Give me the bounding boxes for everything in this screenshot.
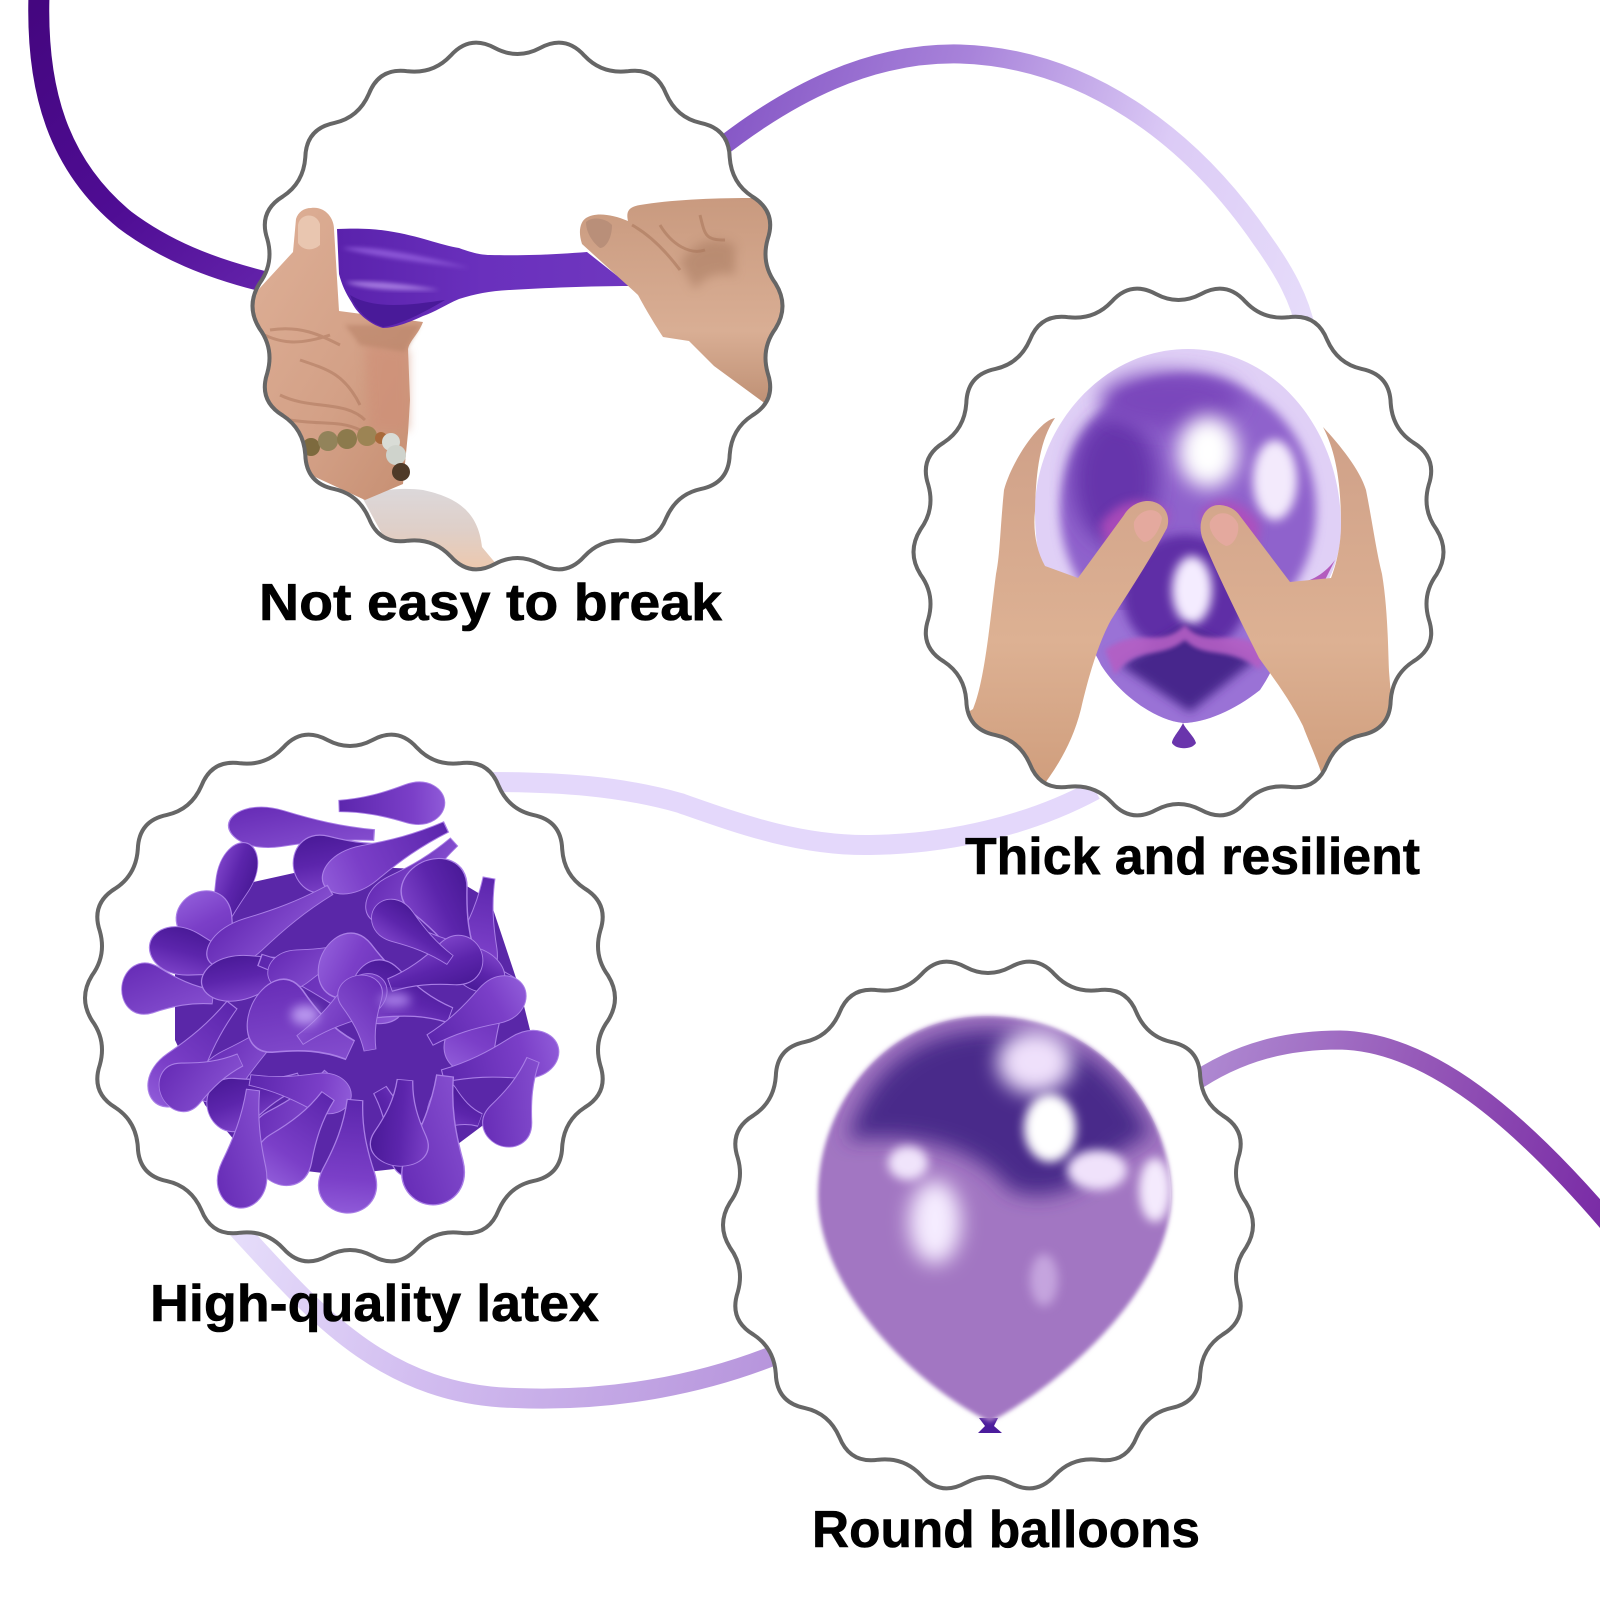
photo: hands squeezing balloon: [970, 349, 1390, 782]
photo: pile of purple balloons: [119, 781, 564, 1215]
panel: round balloons: [723, 962, 1253, 1488]
badge stroke: [914, 289, 1444, 815]
bracelet beads: [302, 426, 410, 481]
ribbon: dark purple from top left: [39, 0, 262, 281]
heading: thick and resilient: Thick and resilient: [965, 828, 1420, 886]
badge fill: [914, 289, 1444, 815]
badge outline: [252, 43, 782, 569]
badge stroke: [252, 43, 782, 569]
panel: not easy to break: [240, 43, 800, 572]
photo: chrome purple balloon: [818, 1016, 1171, 1433]
heading: round balloons: Round balloons: [812, 1501, 1200, 1559]
badge fill: [723, 962, 1253, 1488]
ribbon: purple to lilac arc: [715, 54, 1306, 330]
heading: not easy to break: Not easy to break: [259, 574, 722, 632]
badge stroke: [723, 962, 1253, 1488]
badge stroke: [85, 735, 615, 1261]
ribbon: pale lilac wave: [490, 782, 1095, 845]
badge fill: [85, 735, 615, 1261]
panel: thick and resilient: [914, 289, 1444, 815]
heading: high-quality latex: High-quality latex: [150, 1275, 599, 1333]
panel: high-quality latex: [85, 735, 615, 1261]
photo: hands stretching balloon: [240, 198, 800, 572]
ribbon: purple to right edge: [1190, 1040, 1600, 1225]
ribbon: lilac lower curve: [225, 1215, 775, 1399]
